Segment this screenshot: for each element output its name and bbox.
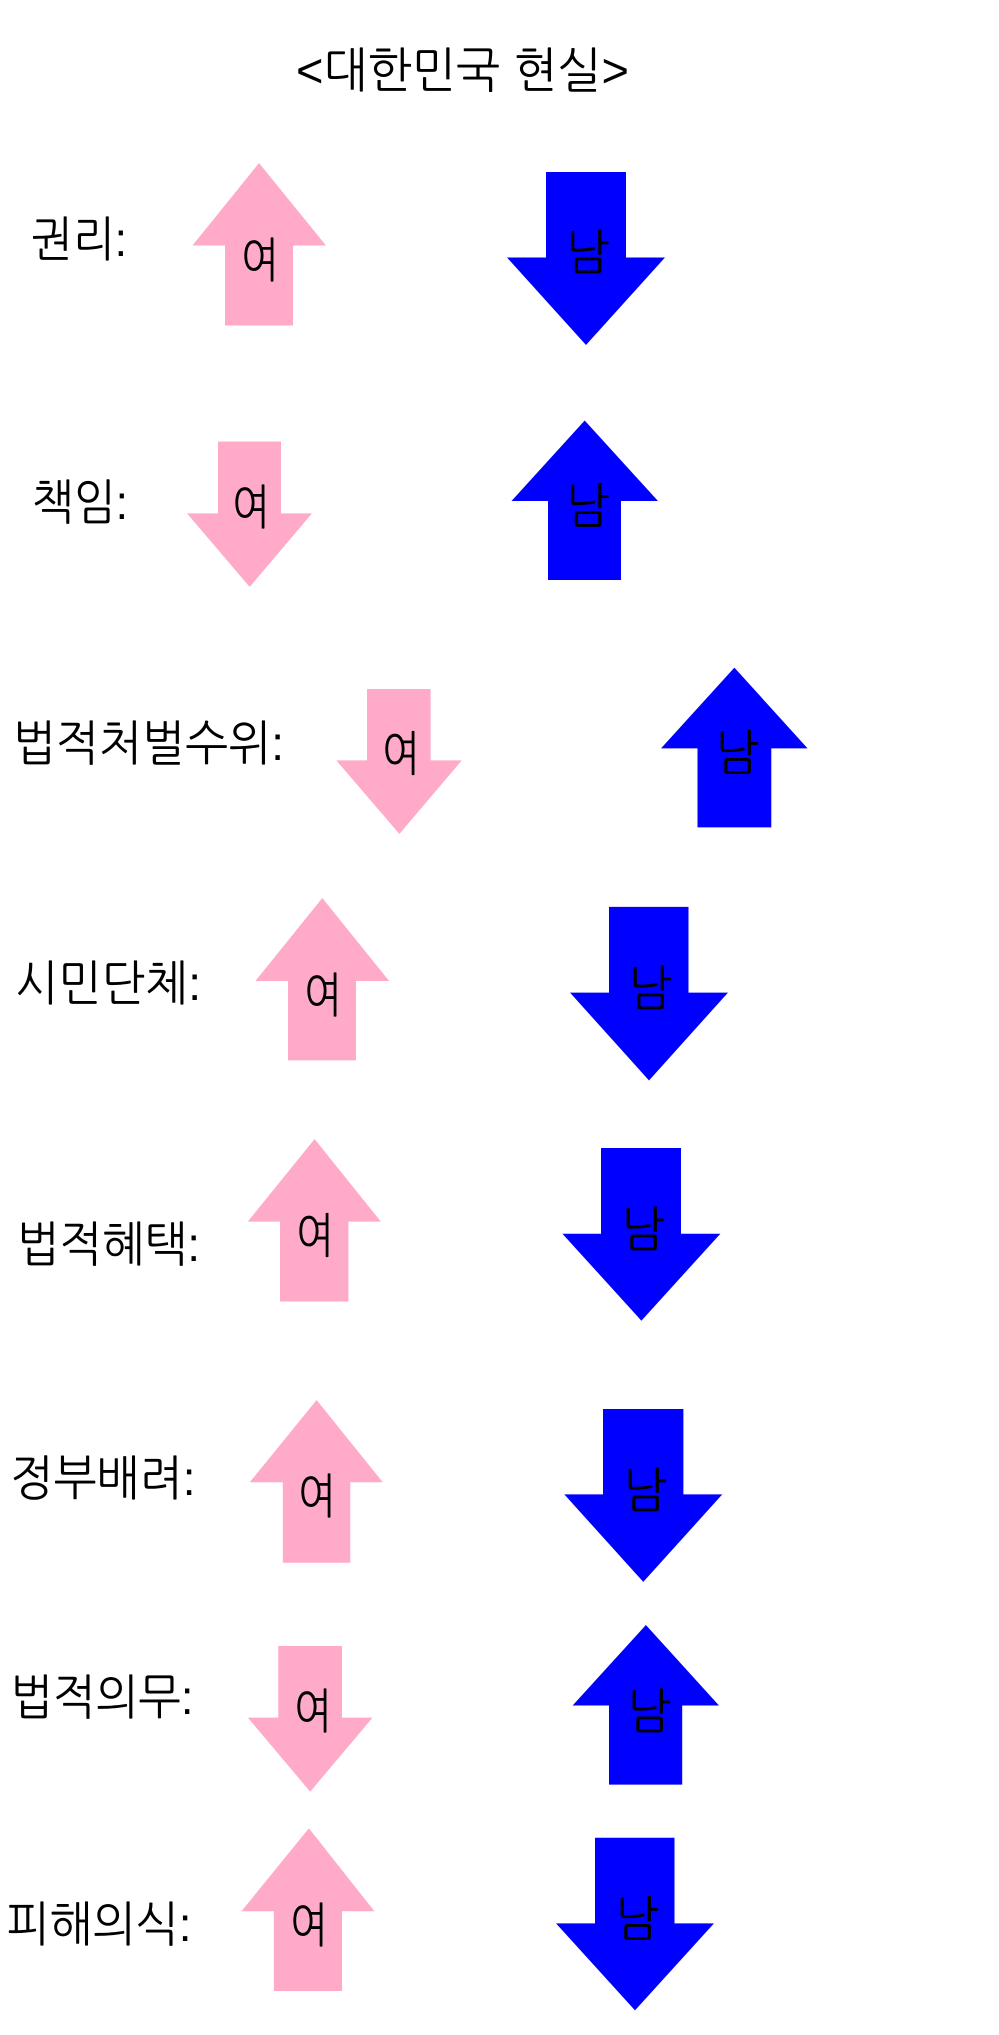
text: female: 여: [232, 482, 270, 535]
row: 법적의무: [10, 1625, 719, 1792]
title: <대한민국 현실>: [296, 45, 629, 98]
arrow: male up: [573, 1625, 719, 1785]
label: 법적처벌수위: 법적처벌수위:: [13, 718, 284, 771]
label: 시민단체: 시민단체:: [15, 958, 201, 1011]
text: male: 남: [566, 480, 610, 534]
text: male: 남: [715, 728, 759, 780]
text: female: 여: [304, 970, 342, 1023]
label: 법적의무: 법적의무:: [10, 1672, 194, 1725]
label: 권리: 권리:: [31, 214, 127, 267]
label: 법적혜택: 법적혜택:: [17, 1219, 200, 1272]
text: male: 남: [628, 963, 672, 1016]
arrow: female up: [250, 1400, 383, 1563]
arrow: male down: [556, 1838, 714, 2010]
arrow: male down: [562, 1148, 720, 1321]
arrow: female up: [255, 898, 389, 1060]
label: 피해의식: 피해의식:: [6, 1899, 192, 1952]
row: 법적처벌수위: [13, 668, 808, 834]
arrow: female down: [248, 1646, 373, 1792]
text: male: 남: [621, 1204, 665, 1257]
arrow: male down: [570, 907, 728, 1080]
arrow: female up: [241, 1828, 374, 1991]
row: 피해의식: [6, 1828, 714, 2010]
row: 권리: [31, 163, 665, 345]
text: female: 여: [294, 1686, 332, 1739]
text: female: 여: [296, 1210, 334, 1264]
text: female: 여: [290, 1900, 328, 1953]
arrow: male down: [507, 172, 665, 345]
text: male: 남: [615, 1894, 659, 1946]
text: female: 여: [382, 728, 420, 782]
text: female: 여: [241, 235, 279, 288]
arrow: male up: [512, 420, 658, 580]
label: 책임: 책임:: [32, 477, 128, 530]
arrow: female up: [192, 163, 326, 326]
arrow: female down: [336, 689, 462, 834]
arrow: male down: [564, 1409, 722, 1582]
label: 정부배려: 정부배려:: [10, 1453, 196, 1506]
arrow: female down: [187, 442, 312, 587]
text: male: 남: [566, 227, 610, 280]
row: 책임: [32, 420, 658, 587]
row: 정부배려: [10, 1400, 722, 1582]
row: 법적혜택: [17, 1139, 720, 1321]
text: male: 남: [627, 1686, 671, 1739]
text: male: 남: [623, 1465, 667, 1518]
row: 시민단체: [15, 898, 728, 1080]
arrow: male up: [661, 668, 808, 827]
text: female: 여: [298, 1471, 336, 1524]
arrow: female up: [248, 1139, 381, 1302]
